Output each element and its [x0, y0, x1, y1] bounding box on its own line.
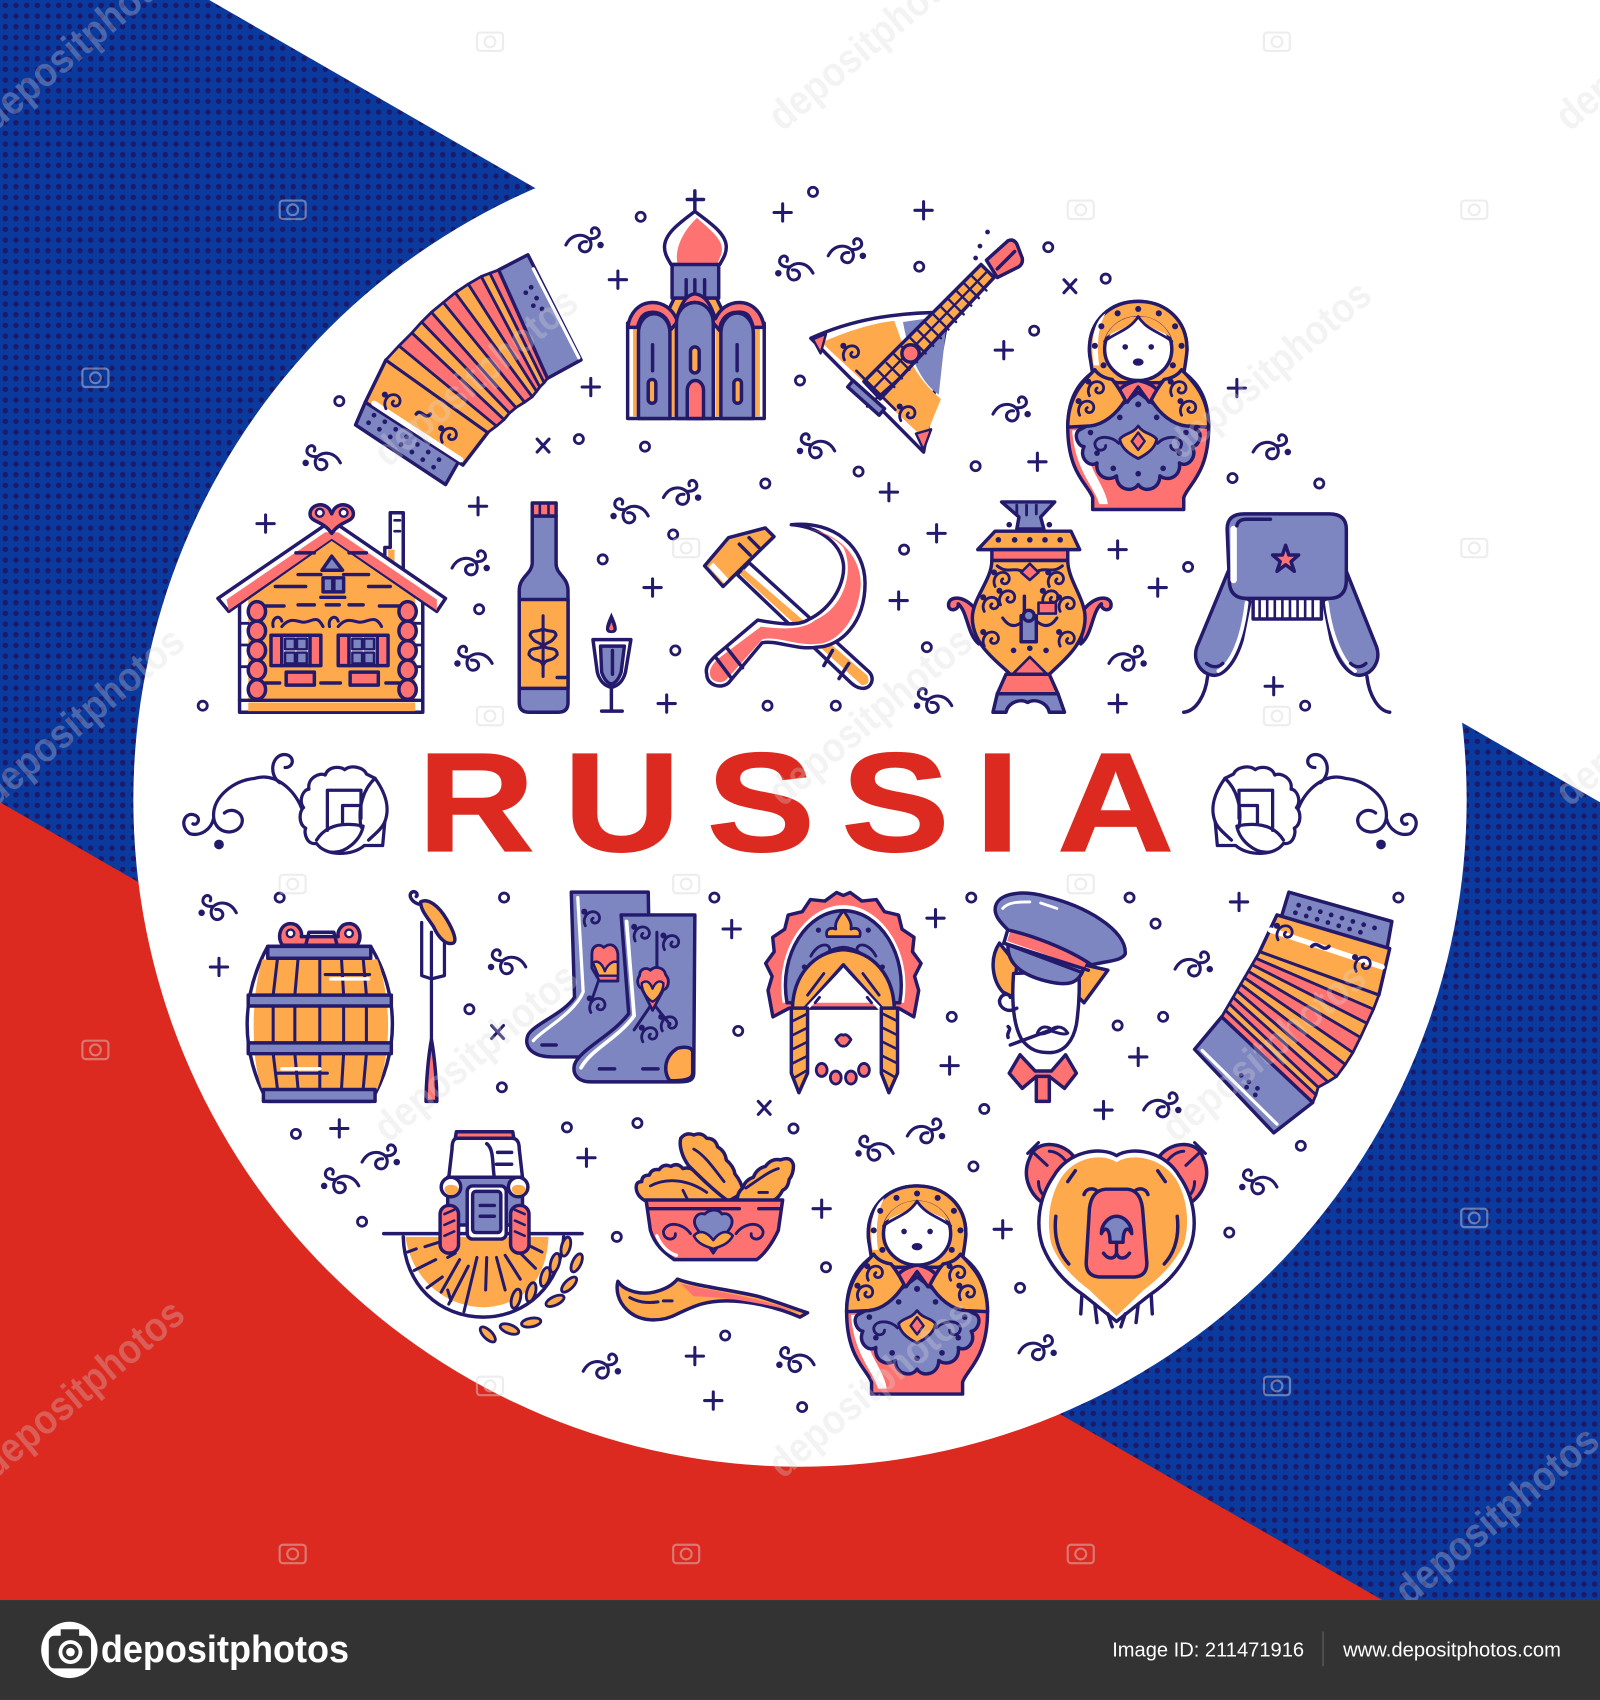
scattered decorative rings, plus signs and swirls — [198, 187, 1403, 1412]
icon: left floral ornament — [184, 754, 387, 853]
icon: hammer and sickle — [705, 524, 872, 688]
icon: cossack man — [993, 893, 1125, 1101]
icon: valenki felt boots — [527, 892, 695, 1082]
central white circle — [133, 133, 1467, 1467]
icon: vodka bottle — [519, 503, 568, 712]
icon: shot glass with flame — [593, 612, 631, 711]
icon: depositphotos camera logo — [41, 1622, 98, 1678]
icon: tractor in field with wheat — [384, 1132, 585, 1344]
icon: balalaika — [811, 230, 1022, 452]
watermark overlay: depositphotos — [1158, 271, 1380, 468]
footer logo wordmark: depositphotos — [101, 1629, 349, 1671]
icon: samovar — [949, 502, 1111, 712]
watermark overlay: depositphotos — [759, 618, 981, 815]
icon: sausage on fork — [410, 892, 455, 1101]
icon: kokoshnik headdress — [766, 892, 921, 1093]
icon: ushanka hat — [1184, 514, 1390, 712]
website: www.depositphotos.com — [1342, 1639, 1561, 1661]
icon: wooden spoon — [617, 1279, 808, 1320]
icon: accordion lower right — [1195, 892, 1392, 1133]
icon: bear head — [1026, 1143, 1207, 1327]
icon: pelmeni in painted bowl — [636, 1134, 793, 1260]
image id: Image ID: 211471916 — [1112, 1639, 1304, 1661]
watermark overlay: depositphotos — [364, 954, 587, 1151]
title: RUSSIA — [418, 725, 1174, 882]
icon: church — [628, 191, 764, 418]
watermark camera marks — [82, 33, 1487, 1563]
watermark overlay: depositphotos — [364, 278, 587, 475]
icon: accordion upper left — [356, 255, 581, 485]
icon: izba log house — [218, 505, 446, 712]
background: red triangle — [0, 802, 1382, 1600]
icon: matryoshka upper — [1068, 301, 1209, 510]
icon: matryoshka lower — [847, 1186, 988, 1394]
watermark overlay: depositphotos — [1152, 954, 1375, 1151]
icon: barrel — [247, 924, 392, 1101]
icon: right floral ornament — [1213, 754, 1416, 853]
watermark overlay: depositphotos — [759, 1290, 981, 1487]
footer bar — [0, 1600, 1600, 1700]
